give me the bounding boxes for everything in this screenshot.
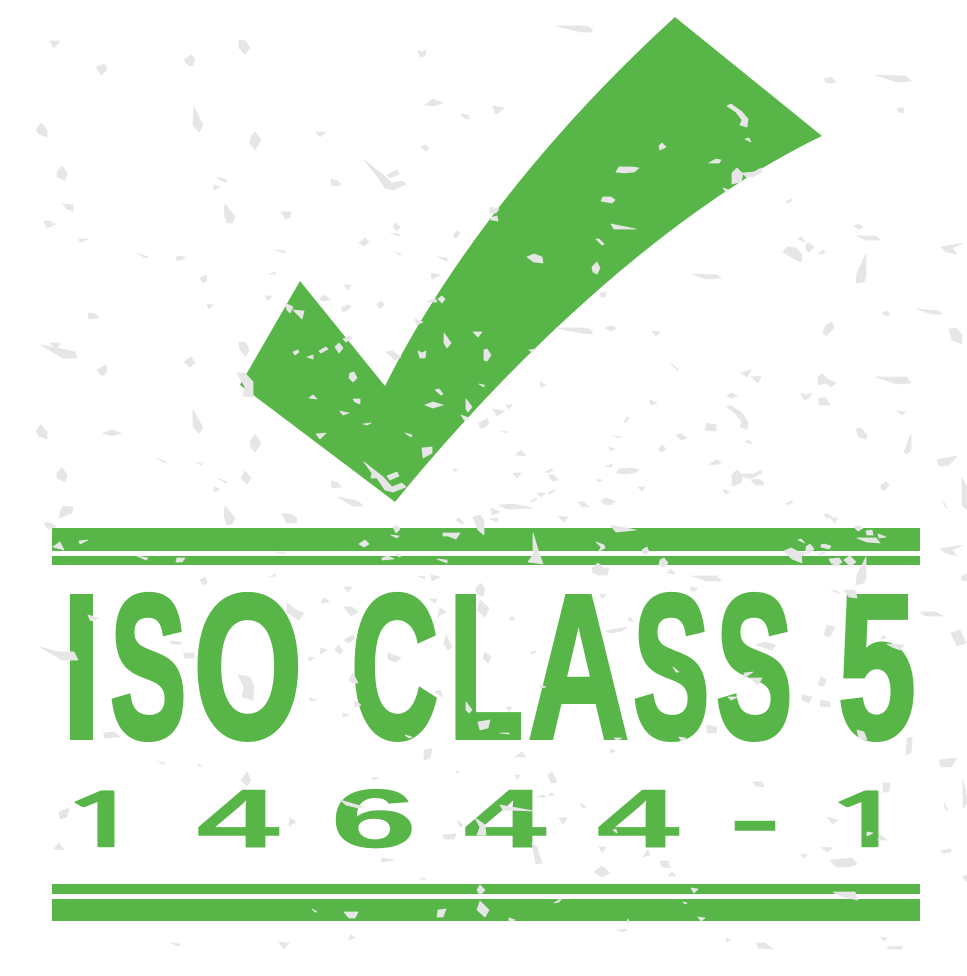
standard number: 14644-1: 4 (463, 771, 547, 865)
title: ISO CLASS 5 (62, 552, 916, 782)
icon: green check mark (240, 17, 822, 502)
standard number: 14644-1: 4 (196, 771, 280, 865)
standard number: 14644-1: 4 (596, 771, 680, 865)
standard number: 14644-1: 6 (330, 771, 417, 866)
title: ISO CLASS 5: I (62, 552, 100, 781)
title: ISO CLASS 5: O (194, 553, 302, 782)
title: ISO CLASS 5: S (633, 554, 710, 782)
bottom double rule (52, 884, 920, 921)
title: ISO CLASS 5: C (351, 552, 438, 781)
standard number: 14644-1: 1 (54, 784, 151, 858)
title: ISO CLASS 5: A (528, 553, 629, 782)
title: ISO CLASS 5: L (449, 552, 523, 781)
standard number: 14644-1: - (728, 772, 782, 866)
title: ISO CLASS 5: S (716, 554, 793, 782)
title: ISO CLASS 5: S (110, 554, 187, 782)
standard number: 14644-1: 1 (818, 784, 915, 858)
standard number: 14644-1 (54, 771, 915, 866)
title: ISO CLASS 5: 5 (838, 553, 916, 782)
top double rule (52, 528, 920, 565)
